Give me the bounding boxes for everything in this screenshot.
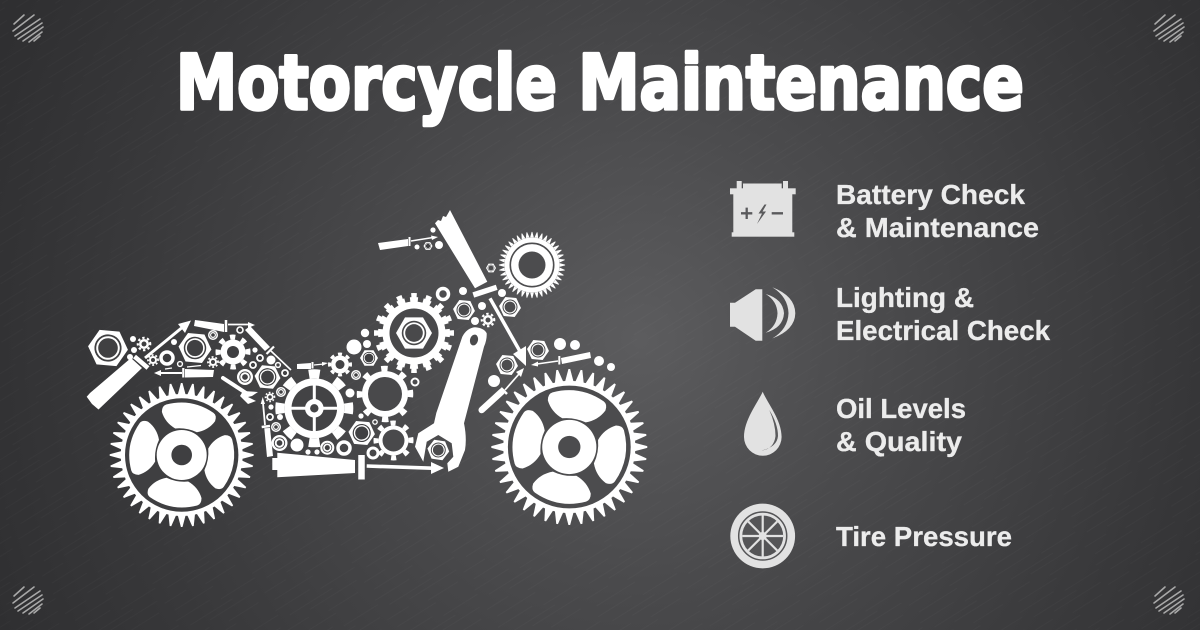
right handlebar screwdriver [531, 352, 591, 366]
icon: oil drop [744, 392, 782, 456]
corner scribble top left [13, 15, 43, 42]
hex nuts [87, 242, 550, 446]
washers [161, 288, 448, 458]
fork screwdriver [435, 210, 526, 366]
oil label: & Quality [836, 426, 962, 457]
large engine gear with cross spokes [280, 374, 349, 443]
exhaust screwdriver [272, 453, 444, 480]
vertical screwdriver [261, 397, 273, 457]
lock washers [208, 330, 361, 455]
tire label: Tire Pressure [836, 521, 1012, 552]
top left screwdriver [194, 320, 255, 332]
large adjustable wrench [415, 327, 487, 472]
lighting label: Lighting & [836, 282, 974, 313]
motorcycle made of tools and gears [87, 210, 659, 538]
diagonal small screwdriver [245, 326, 291, 370]
front fork lower screwdriver [482, 368, 524, 410]
lighting label: Electrical Check [836, 315, 1050, 346]
dots [127, 227, 615, 455]
small gears [138, 314, 494, 402]
oil label [836, 393, 966, 457]
engine top gear with nut [376, 295, 452, 371]
oil label: Oil Levels [836, 393, 966, 424]
middle left screwdriver [154, 366, 214, 378]
icon: tire [730, 504, 795, 568]
battery label: Battery Check [836, 179, 1025, 210]
title: Motorcycle Maintenance [176, 38, 1024, 127]
left big screwdriver [87, 320, 191, 410]
top handlebar screwdriver [378, 236, 438, 250]
small wrench [223, 378, 258, 404]
rear wheel [99, 372, 265, 538]
corner scribble bottom left [13, 587, 43, 614]
headlight gear [494, 227, 570, 303]
corner scribble bottom right [1154, 587, 1184, 614]
lower engine gear [376, 423, 411, 458]
screwdriver above engine gear [297, 362, 328, 369]
battery label: & Maintenance [836, 212, 1039, 243]
battery label [836, 179, 1039, 243]
gear upper left engine [218, 337, 248, 367]
corner scribble top right [1154, 15, 1184, 42]
lighting label [836, 282, 1050, 346]
icon: battery [730, 181, 796, 237]
medium gear center [360, 368, 410, 420]
front wheel [479, 357, 659, 537]
icon: speaker [730, 287, 795, 341]
